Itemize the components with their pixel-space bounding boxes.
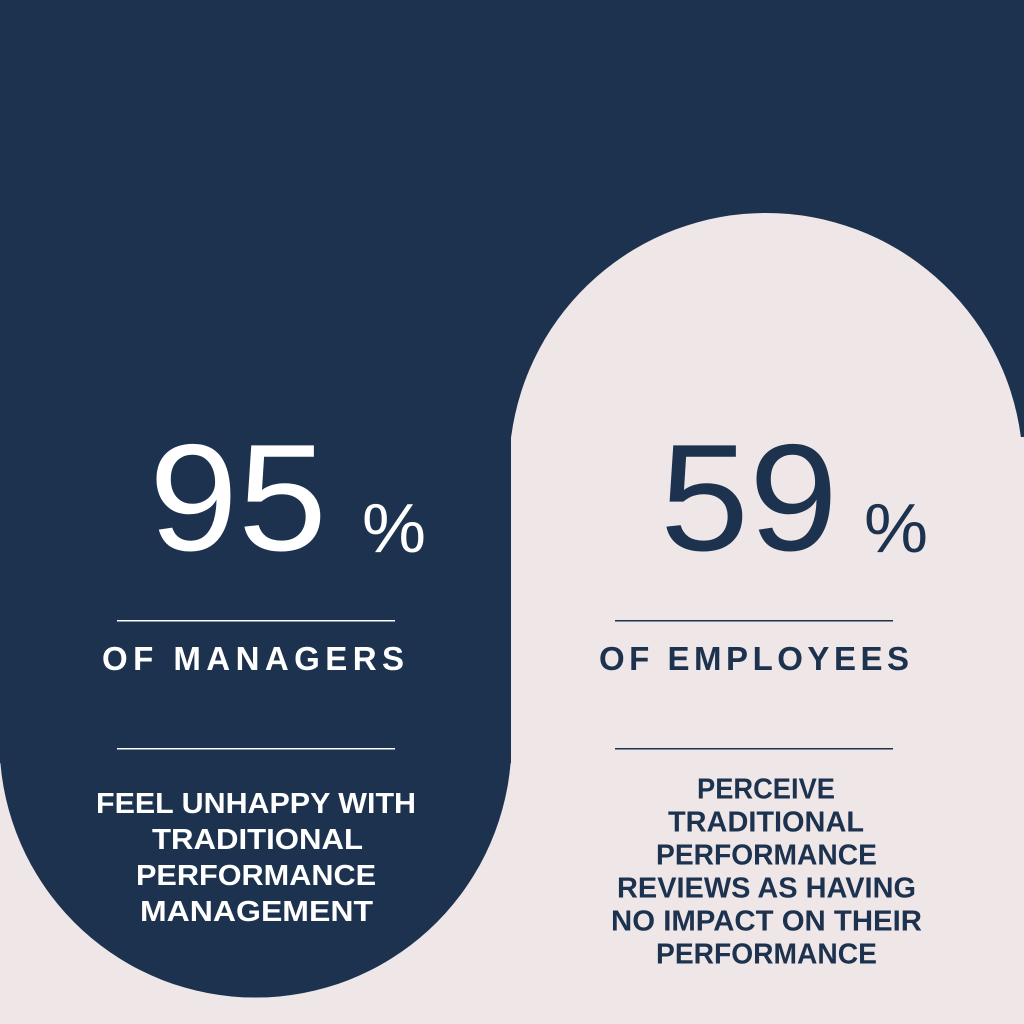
text: employees description — [611, 774, 922, 970]
percent sign: % — [362, 489, 426, 567]
managers statistic — [149, 413, 426, 583]
arch: right panel top — [511, 213, 1021, 437]
text: employees description: PERFORMANCE — [656, 840, 877, 872]
text: managers description: PERFORMANCE — [136, 860, 376, 892]
text: employees description: REVIEWS AS HAVING — [617, 872, 916, 904]
panel: managers — [0, 436, 511, 998]
divider: managers lower — [117, 748, 395, 750]
text: managers description — [96, 788, 416, 928]
text: managers description: TRADITIONAL — [152, 824, 363, 856]
text: employees description: PERFORMANCE — [656, 938, 877, 970]
text: employees description: NO IMPACT ON THEIR — [611, 906, 922, 938]
text: employees description: TRADITIONAL — [668, 806, 864, 838]
divider: employees upper — [615, 620, 893, 622]
employees statistic — [660, 413, 928, 583]
divider: managers upper — [117, 620, 395, 622]
heading: of employees: OF EMPLOYEES — [599, 640, 909, 677]
number 59: 59 — [660, 413, 838, 583]
navy top band — [0, 0, 1024, 437]
text: managers description: MANAGEMENT — [140, 896, 373, 928]
divider: employees lower — [615, 748, 893, 750]
heading: of managers: OF MANAGERS — [102, 640, 404, 677]
percent sign: % — [864, 489, 928, 567]
text: managers description: FEEL UNHAPPY WITH — [96, 788, 416, 820]
text: employees description: PERCEIVE — [697, 774, 835, 806]
number 95: 95 — [149, 413, 327, 583]
